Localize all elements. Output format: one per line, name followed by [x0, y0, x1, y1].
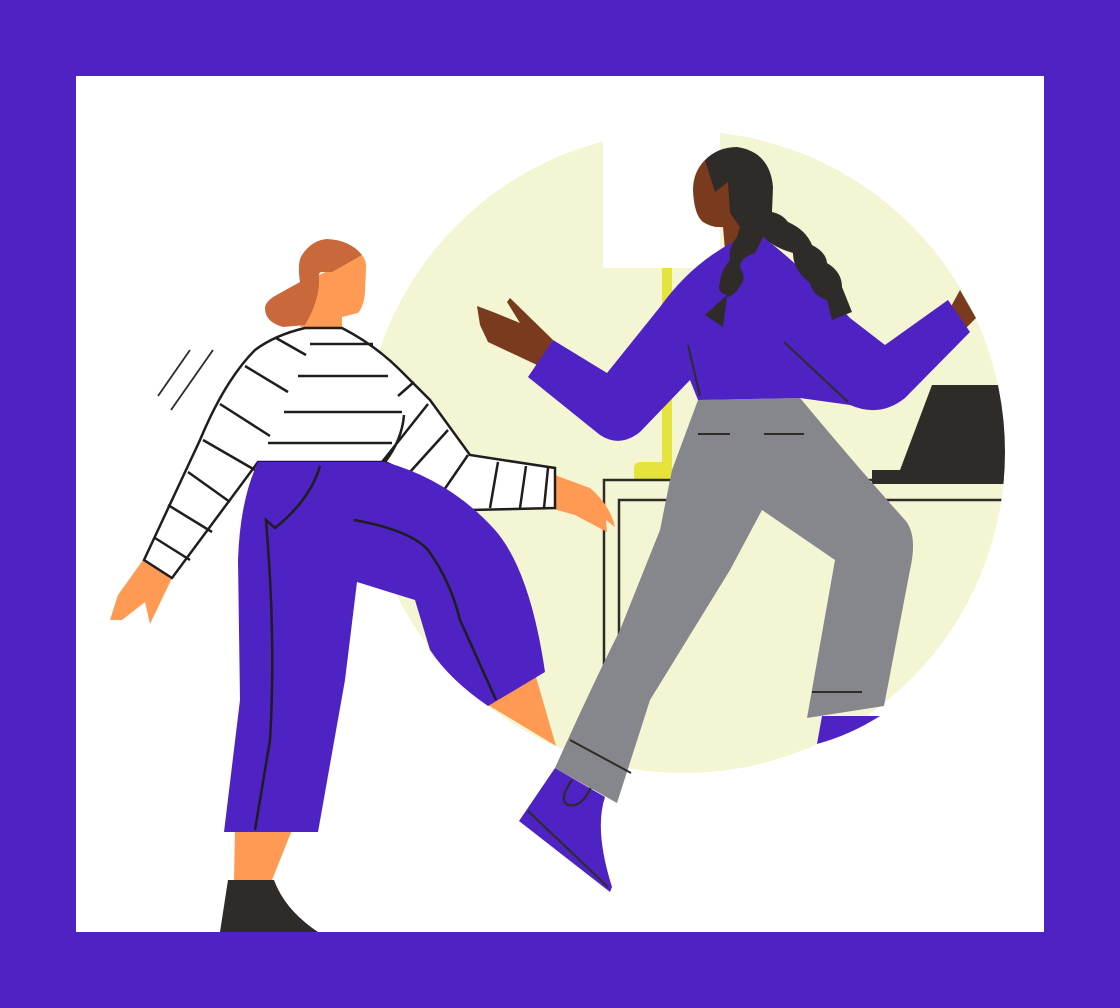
- hair and braids: [705, 147, 852, 327]
- neck and face: [693, 160, 745, 250]
- woman on the right with braids: [477, 147, 976, 892]
- illustration: two women walking inside a purple frame: [76, 76, 1044, 932]
- hair: [265, 239, 362, 327]
- background scene: pale circle with desk and laptop: [363, 120, 1010, 773]
- woman on the left with striped top: [110, 239, 615, 932]
- calf and shoe: [234, 830, 292, 880]
- motion lines: [158, 350, 213, 410]
- purple sweater: [528, 237, 970, 441]
- back hand: [948, 290, 976, 328]
- her back foot: [817, 716, 880, 744]
- striped sweater: [144, 328, 555, 578]
- grey trousers: [555, 398, 913, 803]
- white panel: [76, 76, 1044, 932]
- face and neck: [300, 255, 366, 328]
- purple trousers: [224, 462, 545, 832]
- hands: [110, 560, 172, 624]
- forward hand: [477, 298, 553, 365]
- boot: [519, 768, 612, 892]
